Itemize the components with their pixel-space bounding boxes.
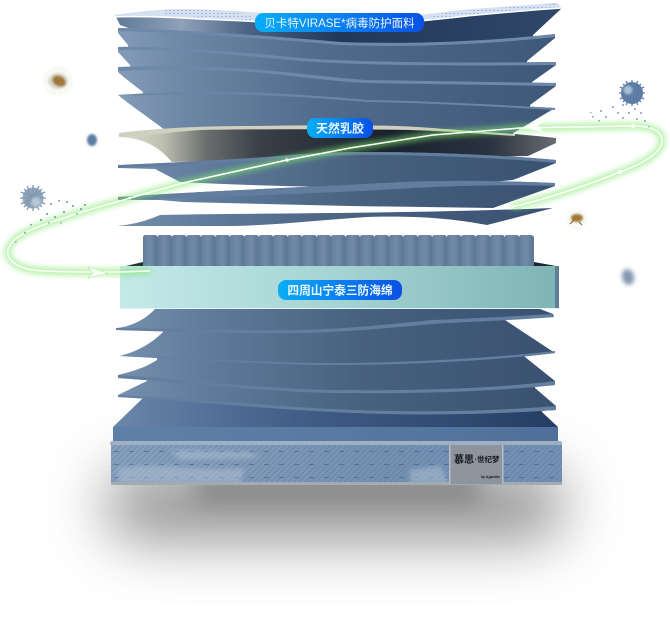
arrow pointing right bbox=[88, 267, 108, 278]
piping top bbox=[110, 441, 562, 445]
icon: brown mite upper left bbox=[43, 66, 73, 96]
layer 11 bbox=[118, 348, 555, 393]
label: natural latex bbox=[307, 118, 373, 138]
brand label bbox=[449, 445, 504, 484]
foam layer bbox=[120, 235, 559, 309]
dark back edge bbox=[126, 262, 556, 266]
ring glow bbox=[8, 126, 662, 272]
layer stack: upper comfort layers bbox=[115, 3, 562, 226]
assembled mattress base bbox=[110, 427, 562, 485]
layer 3 bbox=[118, 66, 556, 113]
layer 8 bbox=[117, 208, 553, 226]
piping bottom bbox=[111, 482, 562, 485]
layer 1 bbox=[118, 28, 555, 68]
ring core bbox=[8, 126, 662, 272]
foam side face bbox=[555, 266, 559, 309]
icon: brown bug right bbox=[566, 208, 588, 230]
label: foam: 四周山宁泰三防海绵 bbox=[287, 284, 393, 298]
icon: blurred blob right bbox=[620, 268, 636, 286]
layer 2 bbox=[118, 47, 556, 90]
layer 9 bbox=[116, 309, 554, 333]
teal foam block bbox=[120, 266, 556, 309]
layer 5: natural latex bbox=[119, 125, 556, 162]
base top layer bbox=[113, 388, 558, 427]
layer 4 bbox=[118, 92, 555, 140]
icon: virus right with particles bbox=[590, 80, 650, 128]
layer stack: lower support layers bbox=[113, 309, 558, 427]
green orbit ring with arrows bbox=[8, 120, 662, 278]
layer 10 bbox=[120, 315, 555, 365]
arrow pointing left bbox=[523, 120, 543, 132]
top band bbox=[113, 427, 558, 441]
pocket spring ribs bbox=[143, 235, 534, 268]
icon: virus left with particles bbox=[15, 185, 86, 242]
brand label: 慕思 bbox=[454, 453, 474, 466]
layer 6 bbox=[118, 152, 556, 187]
label: virus protection fabric bbox=[255, 13, 424, 32]
brand label: ·世纪梦 bbox=[474, 454, 500, 464]
floor shadow bbox=[105, 470, 565, 540]
quilted side panel bbox=[111, 444, 562, 483]
top virus-protection cover bbox=[115, 3, 562, 46]
label: virus protection fabric: 贝卡特VIRASE*病毒防护面料 bbox=[264, 16, 415, 30]
layer 7 bbox=[118, 181, 555, 208]
layer 12 bbox=[118, 368, 556, 414]
label: foam bbox=[278, 280, 402, 300]
brand label: by Aganthe bbox=[481, 475, 500, 479]
icon: small blue blob left bbox=[87, 134, 97, 146]
label: natural latex: 天然乳胶 bbox=[316, 120, 364, 136]
